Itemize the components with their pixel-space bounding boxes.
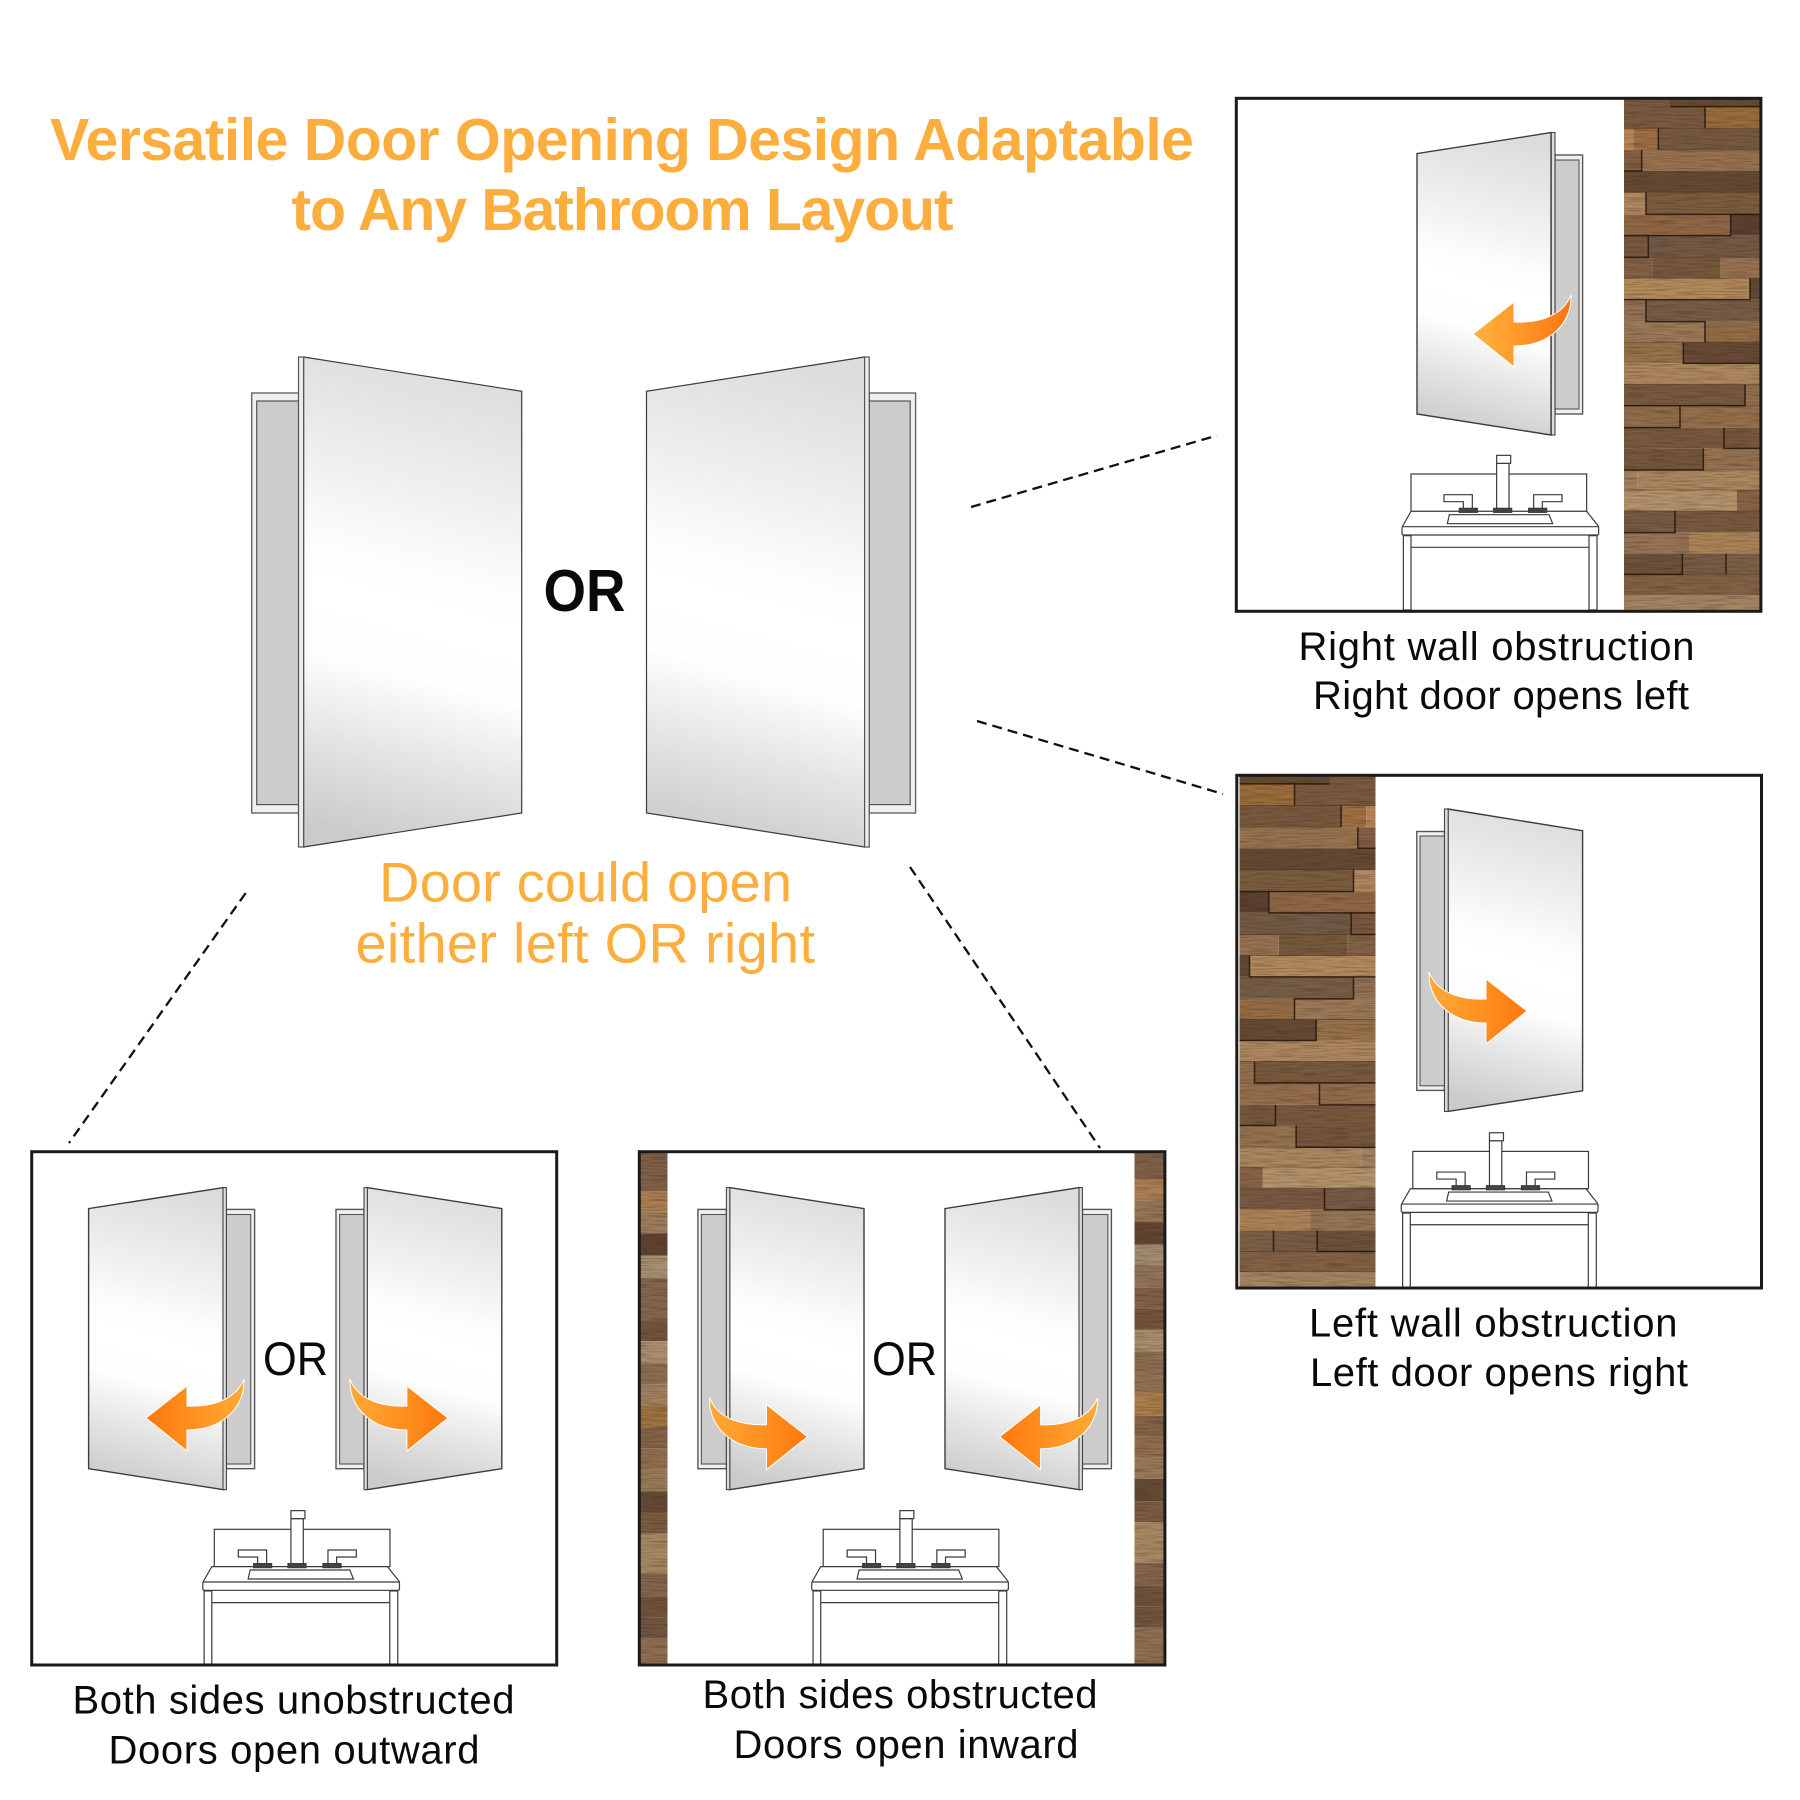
caption: both sides unobstructed: Doors open outward xyxy=(108,1728,480,1772)
title: Versatile Door Opening Design Adaptable xyxy=(50,107,1194,173)
panel: both sides unobstructed xyxy=(31,1151,557,1666)
arrow xyxy=(1473,295,1571,367)
frame xyxy=(1236,98,1761,611)
caption: both sides obstructed: Both sides obstructed xyxy=(702,1673,1098,1717)
frame xyxy=(32,1152,557,1665)
cabinet open leftward xyxy=(1417,133,1583,435)
caption: left wall obstruction xyxy=(1309,1302,1688,1395)
caption: both sides obstructed xyxy=(702,1673,1098,1767)
caption: left wall obstruction: Left door opens right xyxy=(1310,1351,1688,1395)
subtitle: door could open either way: either left OR right xyxy=(356,912,815,974)
wood wall right xyxy=(1624,99,1760,612)
right cabinet xyxy=(945,1188,1111,1490)
main mirror cabinets illustration xyxy=(252,357,916,847)
wood strip left xyxy=(640,1152,668,1665)
caption: both sides unobstructed xyxy=(72,1678,514,1772)
right-hinged main cabinet xyxy=(646,357,916,847)
title: to Any Bathroom Layout xyxy=(292,177,954,243)
dashed connector lines xyxy=(69,436,1223,1148)
title xyxy=(50,107,1194,243)
OR label large: OR xyxy=(544,558,626,624)
caption: left wall obstruction: Left wall obstruction xyxy=(1309,1302,1678,1346)
left-hinged main cabinet xyxy=(252,357,522,847)
arrow xyxy=(1429,972,1527,1044)
frame xyxy=(639,1152,1165,1665)
arrow left-pointing xyxy=(1000,1398,1098,1470)
arrow left xyxy=(146,1379,244,1451)
subtitle: door could open either way: Door could open xyxy=(379,850,792,914)
arrow right-pointing xyxy=(709,1398,808,1470)
cabinet open rightward xyxy=(1417,809,1583,1111)
wood strip right xyxy=(1134,1152,1164,1665)
vanity xyxy=(812,1511,1008,1665)
OR label: OR xyxy=(263,1332,328,1385)
arrow right xyxy=(350,1379,448,1451)
panel: right wall obstruction xyxy=(1235,97,1762,612)
OR label: OR xyxy=(872,1332,937,1385)
left cabinet xyxy=(89,1188,255,1490)
caption: right wall obstruction xyxy=(1298,625,1694,718)
vanity xyxy=(203,1511,399,1665)
left cabinet xyxy=(698,1188,864,1490)
caption: both sides obstructed: Doors open inward xyxy=(734,1723,1078,1767)
frame xyxy=(1237,775,1762,1288)
caption: right wall obstruction: Right wall obstruction xyxy=(1298,625,1694,669)
vanity xyxy=(1402,455,1599,610)
caption: both sides unobstructed: Both sides unobstructed xyxy=(72,1678,514,1722)
caption: right wall obstruction: Right door opens left xyxy=(1313,674,1689,718)
subtitle: door could open either way xyxy=(356,850,815,974)
panel: both sides obstructed xyxy=(638,1151,1165,1666)
wood wall left xyxy=(1240,776,1376,1290)
vanity xyxy=(1401,1133,1598,1287)
panel: left wall obstruction xyxy=(1236,774,1762,1290)
right cabinet xyxy=(336,1188,502,1490)
